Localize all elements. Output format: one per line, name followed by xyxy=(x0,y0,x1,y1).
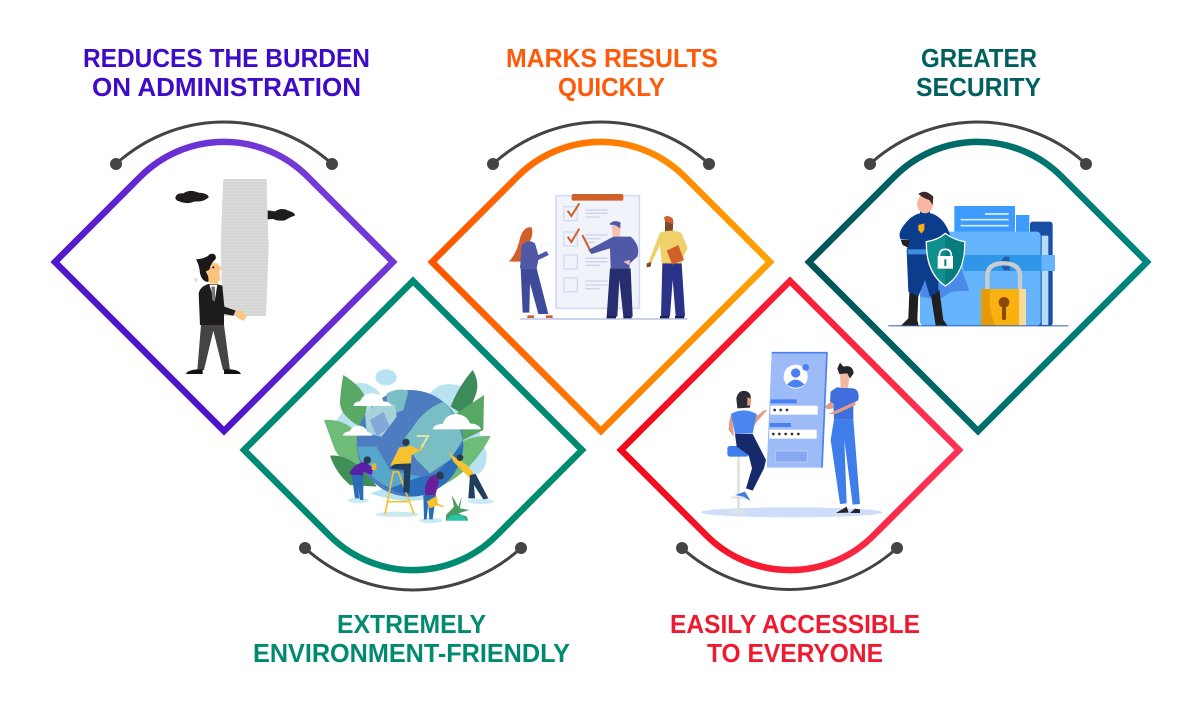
heading: easily accessible to everyone: EASILY ACCESSIBLE xyxy=(670,609,920,639)
heading: reduces the burden: ON ADMINISTRATION xyxy=(92,72,361,102)
heading: marks results quickly: QUICKLY xyxy=(558,72,665,102)
illustration: businessman carrying paper stack xyxy=(175,179,295,374)
heading: extremely environment-friendly xyxy=(253,609,570,668)
connector arc with end dots xyxy=(299,542,527,590)
heading: easily accessible to everyone xyxy=(670,609,920,668)
diamond frame xyxy=(244,281,582,570)
illustration: users at login screen xyxy=(701,352,883,517)
heading: extremely environment-friendly: EXTREMELY xyxy=(337,609,486,639)
diamond frame xyxy=(432,142,770,431)
heading: reduces the burden xyxy=(83,43,370,102)
heading: marks results quickly: MARKS RESULTS xyxy=(506,43,718,73)
heading: greater security: GREATER xyxy=(921,43,1037,73)
panel: easily accessible to everyone xyxy=(621,281,959,668)
heading: greater security xyxy=(916,43,1041,102)
heading: extremely environment-friendly: ENVIRONMENT-FRIENDLY xyxy=(253,638,570,668)
panel: greater security xyxy=(809,43,1147,431)
heading: greater security: SECURITY xyxy=(916,72,1041,102)
panel: reduces the burden on administration xyxy=(55,43,393,431)
illustration: security guard with locked folder xyxy=(888,192,1068,326)
diamond frame xyxy=(621,281,959,570)
connector arc with end dots xyxy=(864,122,1092,170)
connector arc with end dots xyxy=(676,542,903,589)
illustration: people caring for the globe xyxy=(324,369,494,523)
illustration: team reviewing checklist xyxy=(509,194,688,320)
panel: extremely environment-friendly xyxy=(244,281,582,668)
connector arc with end dots xyxy=(110,122,338,170)
clouds xyxy=(343,393,481,436)
heading: reduces the burden: REDUCES THE BURDEN xyxy=(83,43,370,73)
heading: easily accessible to everyone: TO EVERYONE xyxy=(707,638,883,668)
connector arc with end dots xyxy=(487,122,715,170)
diamond frame xyxy=(55,142,393,431)
panel: marks results quickly xyxy=(432,43,770,431)
heading: marks results quickly xyxy=(506,43,718,102)
diamond frame xyxy=(809,142,1147,431)
